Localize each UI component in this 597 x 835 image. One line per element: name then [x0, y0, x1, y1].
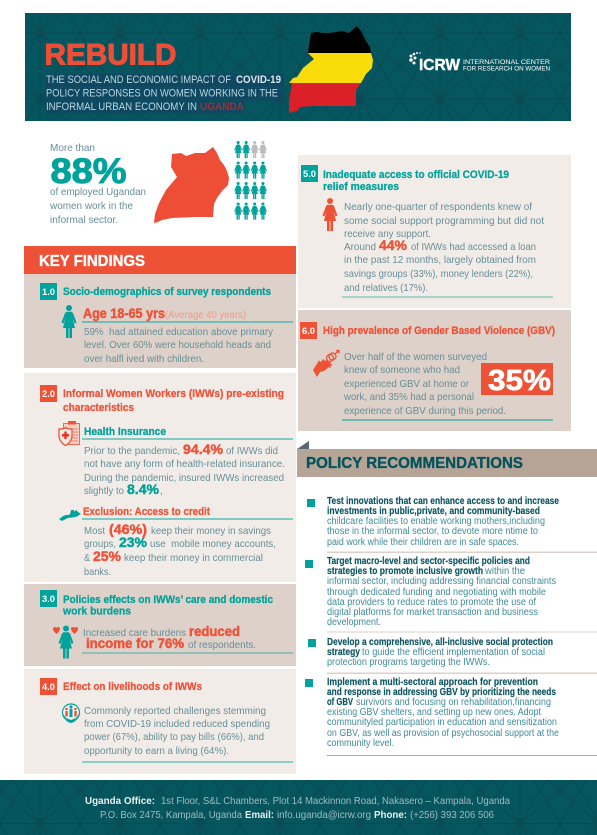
subtitle: THE SOCIAL AND ECONOMIC IMPACT OF — [46, 74, 231, 86]
panel: 4.0 effect on livelihoods: Commonly reported challenges stemming — [84, 706, 266, 717]
panel: 5.0 relief measures: 44% — [379, 238, 407, 253]
panel: 2.0 informal women workers: 2.0 — [42, 389, 55, 399]
icon: red map of Uganda — [154, 147, 229, 223]
icon: Uganda flag map — [289, 26, 373, 113]
logo: ICRW: FOR RESEARCH ON WOMEN — [463, 66, 550, 72]
stat: 88% of employed Ugandan women — [49, 143, 146, 226]
panel: 6.0 gender based violence: experienced GBV at home or — [344, 379, 470, 390]
panel: 3.0 care and domestic work burdens: work burdens — [62, 606, 131, 618]
recommendation 4 — [305, 677, 559, 749]
subtitle — [46, 74, 284, 114]
panel: 2.0 informal women workers: keep their money in savings — [151, 526, 271, 537]
panel: 1.0 socio-demographics: 1.0 — [42, 287, 55, 297]
header banner — [25, 13, 571, 121]
panel: 2.0 informal women workers: banks. — [84, 567, 111, 578]
footer: P.O. Box 2475, Kampala, Uganda — [100, 810, 242, 821]
footer: Uganda Office: — [85, 796, 155, 807]
panel: 5.0 relief measures: receive any support. — [344, 229, 431, 240]
panel: 3.0 care and domestic work burdens: of respondents. — [188, 640, 256, 651]
footer — [0, 780, 597, 835]
subtitle: COVID-19 — [236, 74, 281, 86]
recommendation 2: Target macro-level and sector-specific policies and — [327, 556, 530, 567]
panel: 1.0 socio-demographics: Age 18-65 yrs — [83, 306, 165, 321]
panel: 1.0 socio-demographics: Socio-demographics of survey respondents — [63, 286, 271, 298]
recommendation 1: investments in public,private, and community-based — [327, 506, 540, 517]
panel: 2.0 informal women workers: (46%) — [109, 522, 147, 537]
panel: 3.0 care and domestic work burdens: income for 76% — [86, 636, 184, 651]
recommendation 4: existing GBV shelters, and setting up new ones. Adopt — [327, 707, 541, 718]
panel: 5.0 relief measures: of IWWs had accessed a loan — [411, 242, 536, 253]
panel: 5.0 relief measures: some social support programming but did not — [344, 216, 544, 227]
panel: 2.0 informal women workers: Most — [84, 526, 105, 537]
panel: 2.0 informal women workers: Exclusion: Access to credit — [83, 506, 210, 518]
recommendation 4: on GBV, as well as provision of psychosocial support at the — [327, 728, 559, 739]
recommendation 2: development. — [327, 617, 381, 628]
icon: woman with hearts — [53, 626, 78, 658]
footer: (+256) 393 206 506 — [410, 810, 494, 821]
icon: health insurance — [59, 421, 80, 446]
logo: ICRW — [409, 52, 550, 74]
panel: 5.0 relief measures: 5.0 — [303, 169, 316, 179]
panel: 3.0 care and domestic work burdens: 3.0 — [42, 594, 55, 604]
panel: 5.0 relief measures: Inadequate access to official COVID-19 — [323, 169, 509, 181]
panel: 2.0 informal women workers: During the pandemic, insured IWWs increased — [84, 473, 284, 484]
footer: Phone: — [374, 810, 407, 821]
panel: 6.0 gender based violence — [298, 310, 571, 431]
recommendation 3: protection programs targeting the IWWs. — [327, 657, 490, 668]
panel: 4.0 effect on livelihoods: 4.0 — [42, 682, 55, 692]
heading: key findings: KEY FINDINGS — [39, 253, 145, 270]
recommendation 4: community level. — [327, 738, 394, 749]
panel: 3.0 care and domestic work burdens — [24, 584, 296, 666]
panel: 5.0 relief measures: and relatives (17%). — [344, 283, 428, 294]
panel: 3.0 care and domestic work burdens: reduced — [189, 624, 240, 639]
panel: 6.0 gender based violence: Over half of the women surveyed — [344, 352, 487, 363]
panel: 2.0 informal women workers: , — [160, 486, 163, 497]
stat: 88% of employed Ugandan women: women work in the — [49, 201, 133, 212]
recommendation 4: of GBV — [327, 697, 353, 708]
recommendation 1: Test innovations that can enhance access to and increase — [327, 496, 559, 507]
subtitle: INFORMAL URBAN ECONOMY IN — [46, 101, 197, 113]
icon: woman — [62, 305, 76, 338]
panel: 4.0 effect on livelihoods — [24, 669, 296, 774]
stat: 88% of employed Ugandan women: informal sector. — [50, 215, 118, 226]
heading: key findings — [24, 246, 296, 274]
panel: 6.0 gender based violence: High prevalence of Gender Based Violence (GBV) — [323, 325, 555, 337]
panel: 5.0 relief measures: relief measures — [323, 181, 399, 193]
recommendation 3: Develop a comprehensive, all-inclusive social protection — [327, 637, 553, 648]
panel: 3.0 care and domestic work burdens: Increased care burdens — [83, 628, 186, 639]
panel: 4.0 effect on livelihoods: power (67%), ability to pay bills (66%), and — [84, 732, 264, 743]
panel: 4.0 effect on livelihoods: from COVID-19 included reduced spending — [84, 719, 270, 730]
recommendation 3 — [308, 637, 553, 668]
panel: 2.0 informal women workers: 8.4% — [127, 482, 159, 497]
panel: 2.0 informal women workers: 94.4% — [183, 442, 223, 457]
recommendation 1: childcare facilities to enable working mothers,including — [327, 516, 545, 527]
panel: 6.0 gender based violence: experience of GBV during this period. — [344, 406, 506, 417]
recommendation 2: within the — [484, 566, 526, 577]
panel: 5.0 relief measures: savings groups (33%), money lenders (22%), — [344, 269, 533, 280]
recommendation 2: data providers to reduce rates to promote the use of — [327, 597, 536, 608]
panel: 2.0 informal women workers: Prior to the pandemic, — [84, 446, 180, 457]
panel: 5.0 relief measures: Nearly one-quarter of respondents knew of — [344, 202, 532, 213]
panel: 5.0 relief measures: in the past 12 months, largely obtained from — [344, 255, 536, 266]
panel: 2.0 informal women workers — [24, 373, 296, 582]
icon array: 14 of 16 women — [234, 141, 267, 220]
panel: 5.0 relief measures: Around — [344, 242, 376, 253]
recommendation 1 — [307, 496, 559, 548]
subtitle: UGANDA — [200, 101, 244, 113]
panel: 2.0 informal women workers: use mobile money accounts, — [150, 539, 276, 550]
logo: ICRW: INTERNATIONAL CENTER — [463, 59, 550, 66]
recommendation 4: Implement a multi-sectoral approach for prevention — [327, 677, 538, 688]
recommendation 4: and response in addressing GBV by prioritizing the needs — [327, 687, 556, 698]
recommendation 2: informal sector, including addressing financial constraints — [327, 576, 556, 587]
icon: hand holding money — [59, 510, 81, 521]
callout: 35%: 35% — [488, 365, 551, 397]
recommendation 4: communityled participation in education and sensitization — [327, 717, 557, 728]
panel: 1.0 socio-demographics: 59% had attained education above primary — [84, 327, 274, 338]
recommendation 2: through dedicated funding and negotiating with mobile — [327, 587, 547, 598]
icon: family in hands — [62, 704, 80, 723]
panel: 2.0 informal women workers: Health Insurance — [84, 426, 166, 438]
recommendation 3: strategy — [327, 647, 360, 658]
title: REBUILD — [44, 38, 176, 72]
stat: 88% of employed Ugandan women: More than — [50, 143, 95, 154]
panel: 4.0 effect on livelihoods: Effect on livelihoods of IWWs — [63, 681, 202, 693]
stat: 88% of employed Ugandan women: 88% — [50, 152, 126, 191]
footer: 1st Floor, S&L Chambers, Plot 14 Mackinnon Road, Nakasero – Kampala, Uganda — [161, 796, 510, 807]
recommendation 2 — [305, 556, 556, 628]
footer: Email: — [245, 810, 274, 821]
footer: info.uganda@icrw.org — [277, 810, 371, 821]
panel: 6.0 gender based violence: 6.0 — [302, 326, 315, 336]
panel: 1.0 socio-demographics: (Average 40 years) — [165, 310, 246, 321]
panel: 2.0 informal women workers: of IWWs did — [226, 446, 278, 457]
panel: 5.0 relief measures — [298, 155, 571, 308]
panel: 1.0 socio-demographics: over halfl ived with children. — [84, 354, 204, 365]
panel: 2.0 informal women workers: 23% — [119, 535, 147, 550]
logo: ICRW: ICRW — [419, 57, 460, 74]
icon: raised fist with gender symbols — [313, 350, 339, 377]
heading: policy recommendations: POLICY RECOMMENDATIONS — [306, 455, 523, 472]
panel: 2.0 informal women workers: 25% — [93, 549, 121, 564]
recommendation 1: those in the informal sector, to devote more ntime to — [327, 526, 539, 537]
panel: 1.0 socio-demographics: level. Over 60% were household heads and — [84, 340, 271, 351]
panel: 2.0 informal women workers: & — [84, 553, 90, 564]
stat: 88% of employed Ugandan women: of employed Ugandan — [50, 187, 146, 198]
subtitle: POLICY RESPONSES ON WOMEN WORKING IN THE — [46, 88, 278, 100]
recommendation 4: survivors and focusing on rehabilitation,financing — [356, 697, 551, 708]
panel: 4.0 effect on livelihoods: opportunity to earn a living (64%). — [84, 746, 229, 757]
panel: 2.0 informal women workers: keep their money in commercial — [124, 553, 263, 564]
panel: 6.0 gender based violence: work, and 35% had a personal — [343, 392, 474, 403]
panel: 6.0 gender based violence: knew of someone who had — [344, 365, 460, 376]
panel: 2.0 informal women workers: Informal Women Workers (IWWs) pre-existing — [63, 388, 284, 400]
panel: 2.0 informal women workers: slightly to — [84, 486, 124, 497]
recommendation 2: digital platforms for market transaction and business — [327, 607, 538, 618]
panel: 3.0 care and domestic work burdens: Policies effects on IWWs’ care and domestic — [63, 594, 273, 606]
icon: woman — [322, 198, 338, 231]
recommendation 2: strategies to promote inclusive growth — [327, 566, 483, 577]
panel: 2.0 informal women workers: characteristics — [63, 402, 134, 414]
panel: 2.0 informal women workers: not have any form of health-related insurance. — [84, 459, 285, 470]
panel: 1.0 socio-demographics — [24, 274, 296, 368]
heading: policy recommendations — [297, 441, 597, 477]
panel: 2.0 informal women workers: groups, — [84, 539, 116, 550]
recommendation 3: to guide the efficient implementation of social — [362, 647, 545, 658]
recommendation 1: paid work while their children are in safe spaces. — [327, 537, 519, 548]
